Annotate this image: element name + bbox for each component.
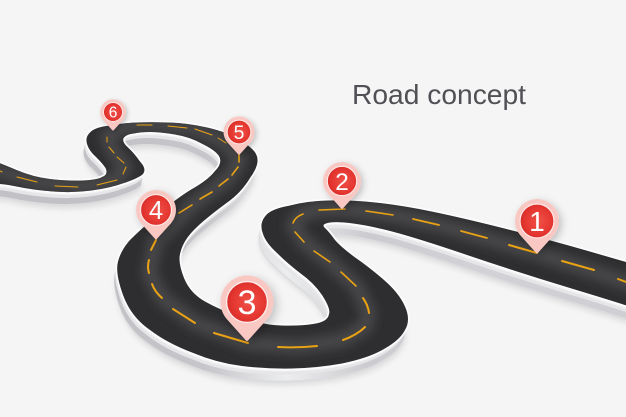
title: Road concept (352, 79, 526, 110)
road ground shadow (0, 139, 626, 386)
road white rim (0, 122, 626, 369)
pin 5 (224, 116, 254, 155)
pin 6: 6 (109, 105, 117, 122)
asphalt surface (0, 122, 626, 369)
infographic canvas (0, 84, 626, 386)
pin 2: 2 (335, 169, 349, 196)
lane dashes (0, 125, 626, 347)
pin 1: 1 (529, 206, 545, 237)
road side wall (0, 125, 626, 383)
pin 2 (323, 162, 361, 209)
asphalt centre sheen (0, 125, 626, 347)
pin 1 (515, 199, 559, 253)
pin 3: 3 (238, 284, 256, 322)
road (0, 122, 626, 386)
pin 4 (136, 190, 176, 239)
pin 4: 4 (149, 197, 163, 225)
pin 6 (100, 99, 126, 131)
pin 3 (220, 275, 274, 341)
pin 5: 5 (234, 122, 244, 144)
